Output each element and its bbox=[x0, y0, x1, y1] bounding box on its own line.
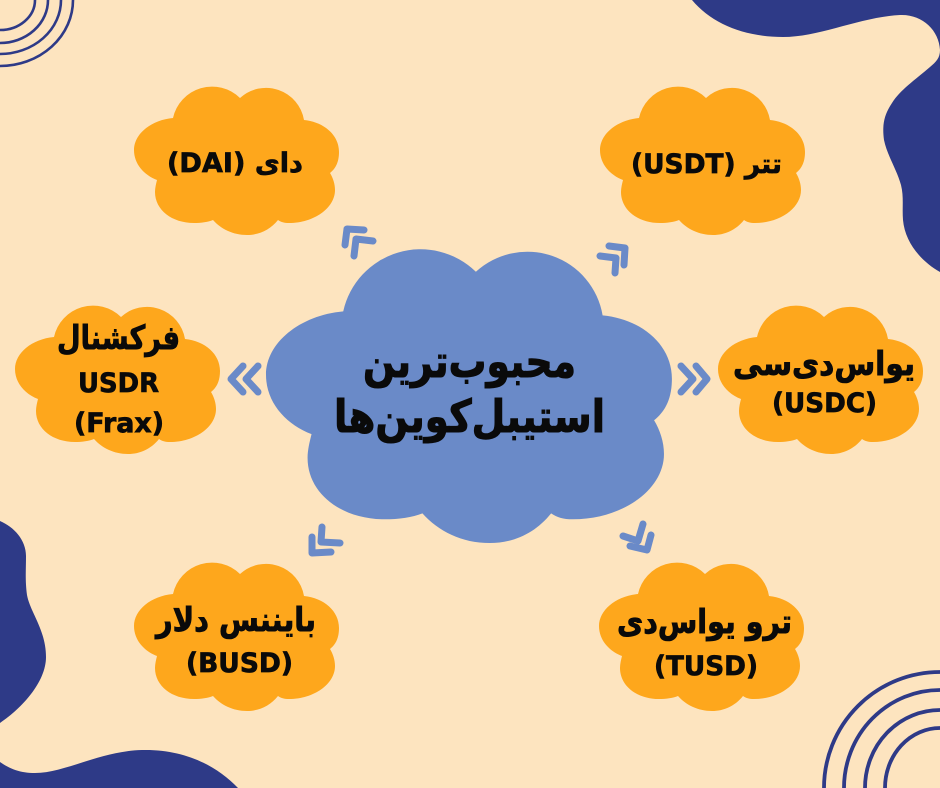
arrow: to DAI bbox=[345, 229, 373, 256]
decorative blob: bottom edge bbox=[0, 750, 238, 788]
cloud: USDT bbox=[600, 87, 805, 235]
cloud: USDC bbox=[718, 306, 923, 454]
decorative blob: top right bbox=[692, 0, 940, 272]
central title: استیبل‌کوین‌ها bbox=[334, 390, 605, 443]
cloud: TUSD bbox=[599, 563, 804, 711]
central title bbox=[334, 335, 605, 443]
cloud: Frax: فرکشنال bbox=[57, 318, 180, 358]
arrow: to USDT bbox=[600, 246, 625, 273]
cloud: TUSD: ترو یواس‌دی bbox=[617, 602, 792, 642]
cloud: Frax: USDR bbox=[78, 368, 159, 399]
cloud: Frax bbox=[15, 306, 220, 454]
decorative rings: bottom right bbox=[824, 672, 940, 788]
cloud: TUSD: (TUSD) bbox=[654, 651, 758, 682]
arrow: to TUSD bbox=[623, 524, 651, 550]
cloud: BUSD: (BUSD) bbox=[186, 648, 293, 679]
arrow: to Frax bbox=[231, 366, 258, 392]
decorative rings: top left bbox=[0, 0, 73, 66]
arrow: to USDC bbox=[681, 366, 707, 392]
central title: محبوب‌ترین bbox=[363, 335, 576, 388]
cloud: USDT: تتر (USDT) bbox=[631, 149, 782, 180]
decorative blob: bottom left side bbox=[0, 521, 46, 723]
cloud: USDC: (USDC) bbox=[772, 388, 877, 419]
arrow: to BUSD bbox=[312, 527, 340, 553]
cloud: Frax: (Frax) bbox=[74, 408, 164, 439]
cloud: USDC: یواس‌دی‌سی bbox=[733, 344, 915, 384]
cloud: BUSD bbox=[134, 563, 339, 711]
cloud: BUSD: بایننس دلار bbox=[154, 600, 316, 639]
central cloud: most popular stablecoins bbox=[266, 249, 672, 543]
cloud: DAI: دای (DAI) bbox=[167, 148, 303, 179]
cloud: DAI bbox=[134, 87, 339, 235]
